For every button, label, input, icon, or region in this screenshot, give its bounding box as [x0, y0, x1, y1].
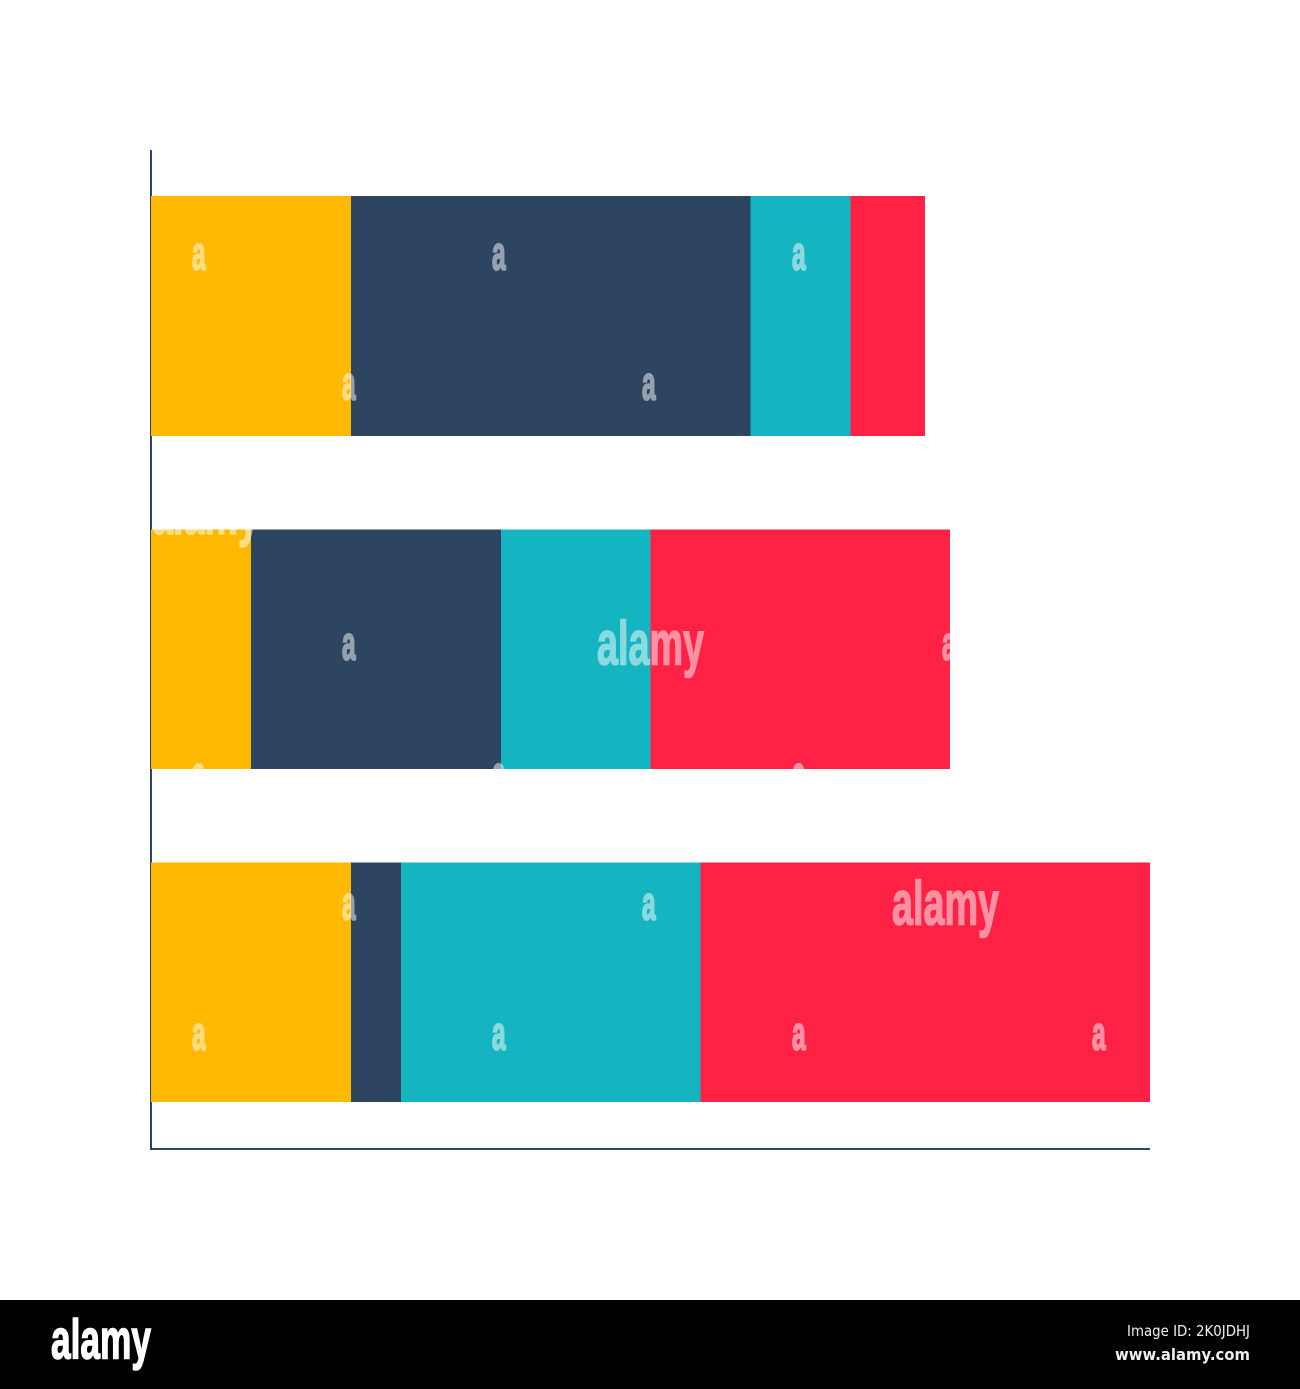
website: www.alamy.com	[1115, 1345, 1250, 1364]
bar 1	[151, 196, 925, 436]
watermark pattern: a	[492, 747, 506, 800]
watermark pattern: a	[642, 357, 656, 410]
bar 3	[151, 862, 1150, 1102]
watermark pattern: a	[492, 1007, 506, 1060]
watermark pattern: a	[492, 227, 506, 280]
watermark pattern: a	[792, 1007, 806, 1060]
watermark pattern	[192, 227, 1106, 1060]
watermark pattern: a	[642, 877, 656, 930]
watermark pattern: a	[192, 1007, 206, 1060]
watermark pattern: a	[792, 747, 806, 800]
image id: Image ID: 2K0JDHJ	[1127, 1322, 1250, 1340]
bar 2	[151, 530, 950, 769]
watermark pattern: a	[792, 227, 806, 280]
watermark: alamy top left: alamy	[152, 479, 259, 548]
chart axes	[151, 150, 1150, 1149]
watermark: alamy centre: alamy	[597, 610, 704, 678]
watermark pattern: a	[342, 617, 356, 670]
watermark pattern: a	[342, 877, 356, 930]
watermark pattern: a	[1092, 1007, 1106, 1060]
watermark pattern: a	[192, 227, 206, 280]
footer bar	[0, 1300, 1300, 1389]
logo: alamy	[51, 1308, 151, 1370]
watermark pattern: a	[942, 617, 956, 670]
watermark pattern: a	[192, 747, 206, 800]
watermark: alamy right: alamy	[892, 870, 999, 938]
watermark pattern: a	[342, 357, 356, 410]
